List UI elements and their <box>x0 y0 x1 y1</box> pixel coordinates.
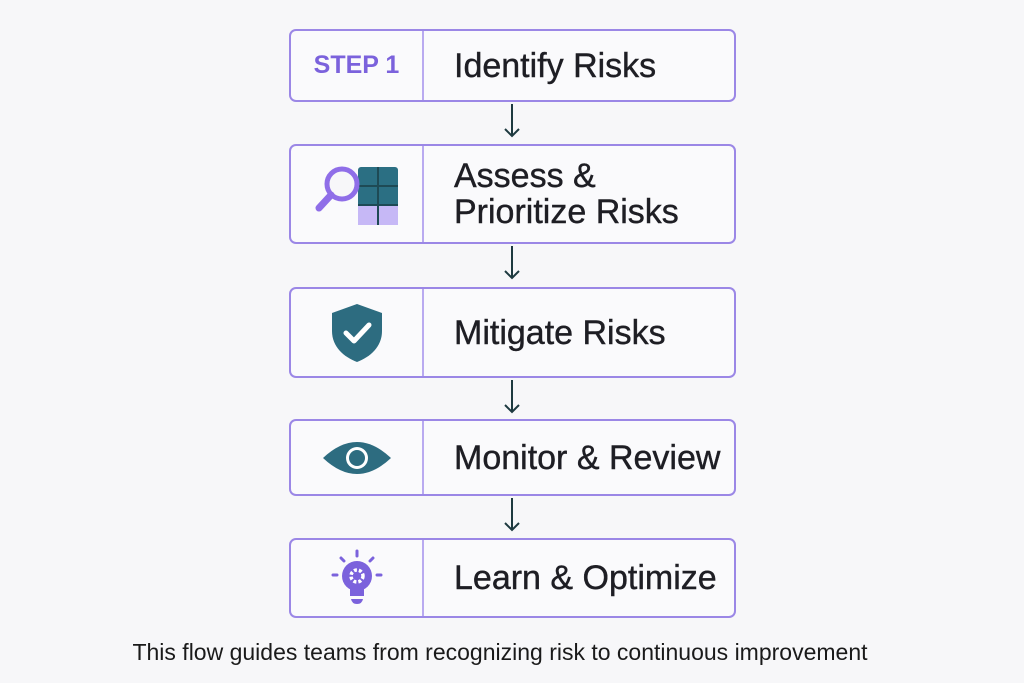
text: assess: Assess & <box>454 157 596 195</box>
icon: lightbulb gear <box>332 550 382 604</box>
arrow 3 <box>504 380 520 414</box>
arrow 2 <box>504 246 520 280</box>
text: assess: Prioritize Risks <box>454 193 679 231</box>
arrow 1 <box>504 104 520 138</box>
step 1 box <box>289 29 736 102</box>
text: mitigate: Mitigate Risks <box>454 314 666 352</box>
text: identify risks: Identify Risks <box>454 46 656 84</box>
label: step 1: STEP 1 <box>314 51 399 79</box>
step 5 box <box>289 538 736 618</box>
step 2 box <box>289 144 736 244</box>
step 4 box <box>289 419 736 496</box>
caption: This flow guides teams from recognizing risk to continuous improvement <box>132 639 868 665</box>
step 3 box <box>289 287 736 378</box>
icon: eye <box>323 442 391 474</box>
text: assess <box>454 157 679 231</box>
icon: magnifier grid <box>316 166 398 225</box>
text: learn: Learn & Optimize <box>454 559 717 597</box>
arrow 4 <box>504 498 520 532</box>
icon: shield <box>332 304 382 362</box>
text: monitor: Monitor & Review <box>454 438 720 476</box>
